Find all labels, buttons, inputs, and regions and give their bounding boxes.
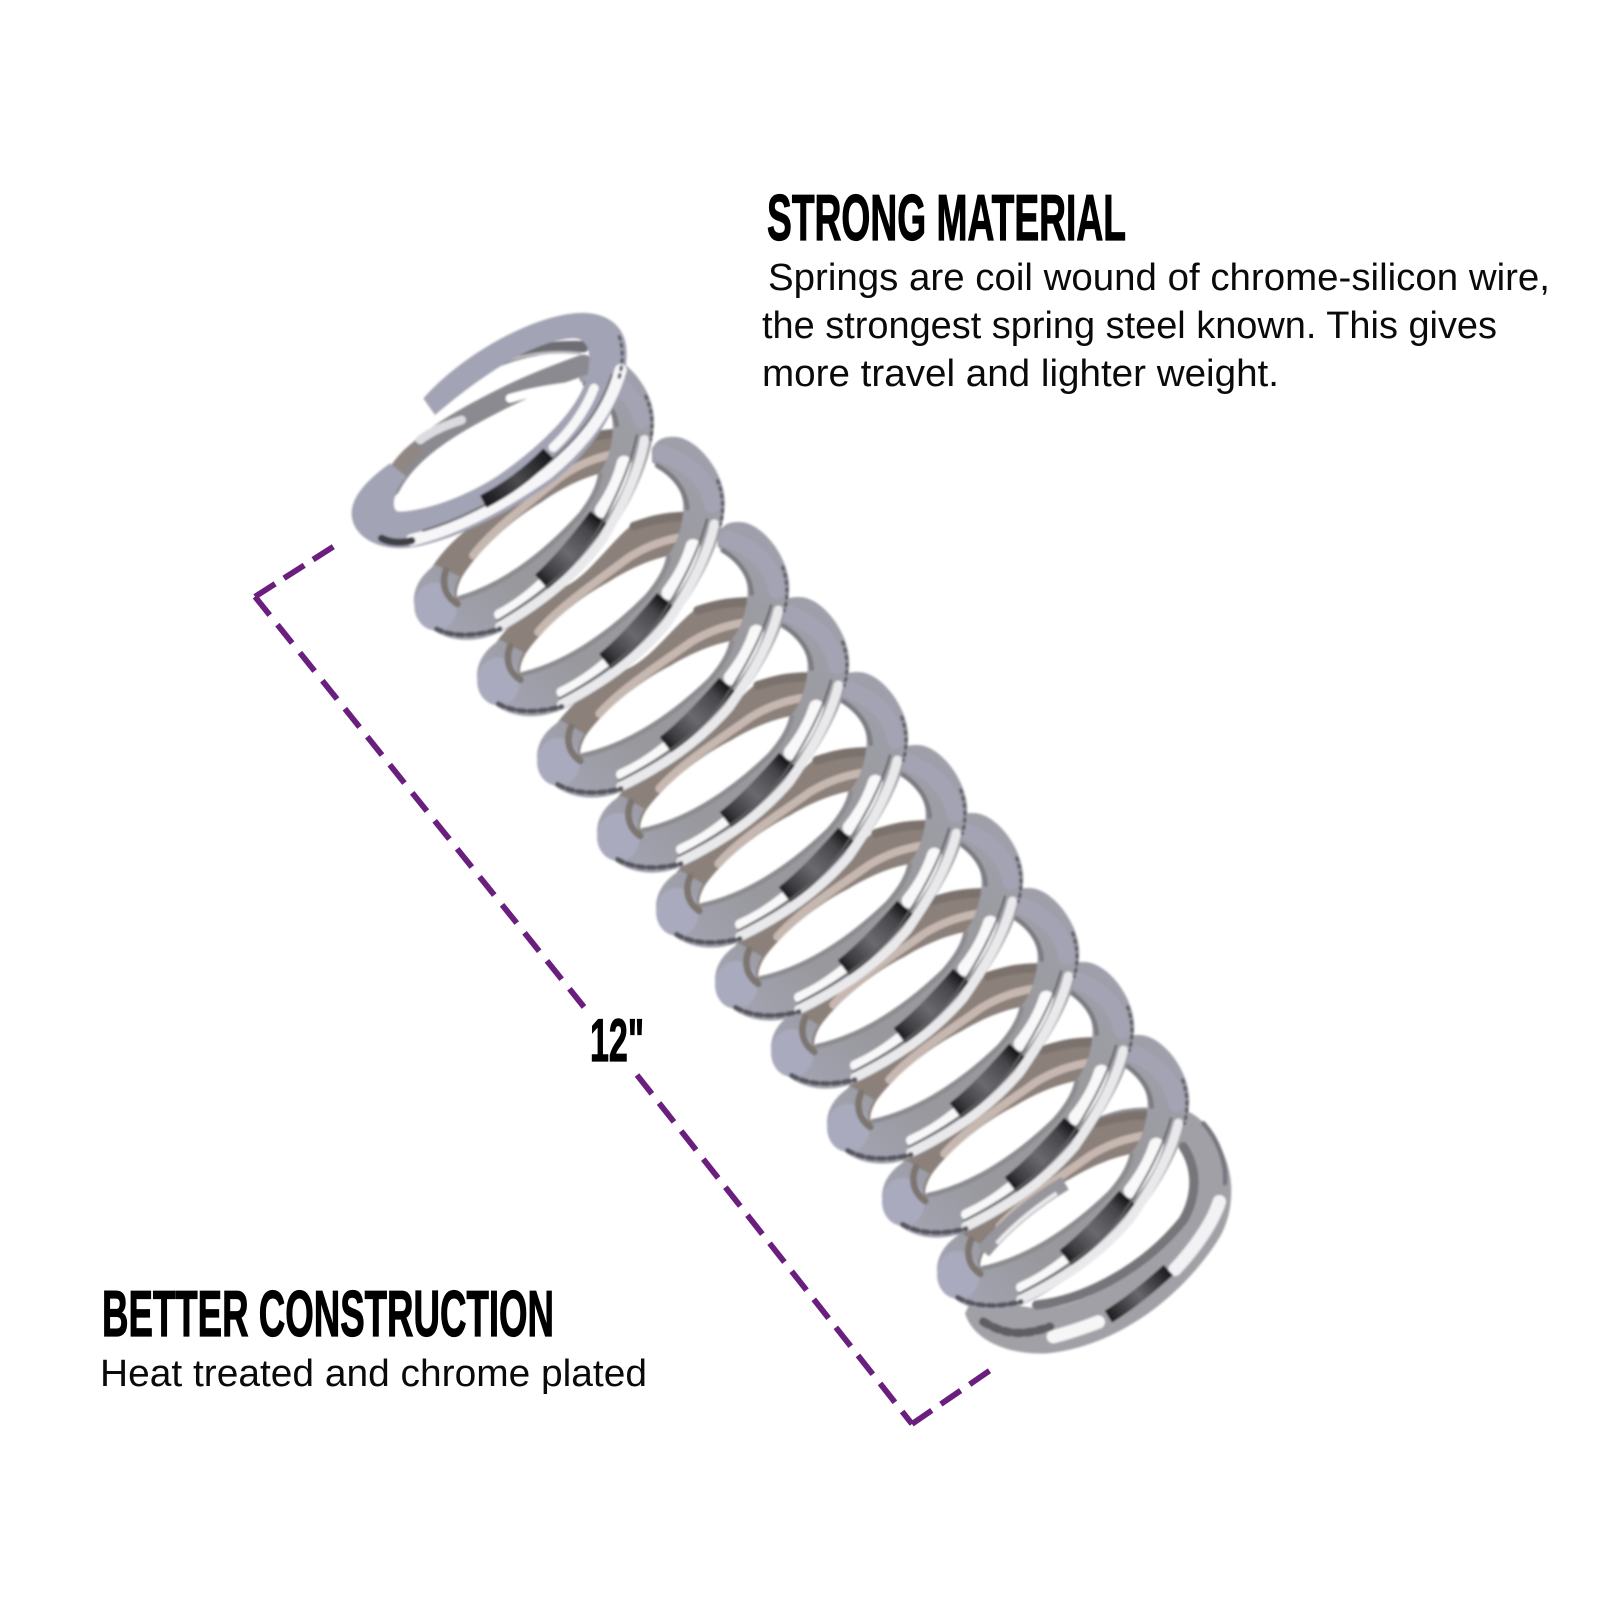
coil 2	[398, 351, 669, 644]
dimension bracket: dashed purple line	[255, 547, 992, 1424]
description: Springs are coil wound of chrome-silicon wire,	[768, 257, 1550, 299]
coil 5	[597, 597, 849, 873]
heading: STRONG MATERIAL	[767, 181, 1126, 254]
coil 9	[827, 888, 1079, 1164]
description	[762, 257, 1550, 395]
description: Heat treated and chrome plated	[100, 1353, 647, 1395]
text block: strong material	[762, 181, 1550, 395]
coil 4	[537, 522, 789, 798]
dimension label: 12"	[590, 1007, 644, 1074]
coil 12: bottom ring	[965, 1110, 1231, 1353]
coil 11	[937, 1035, 1189, 1311]
coil 3	[471, 435, 730, 718]
description: more travel and lighter weight.	[762, 353, 1279, 395]
coil 7	[715, 745, 967, 1021]
text block: better construction	[100, 1277, 647, 1395]
heading: BETTER CONSTRUCTION	[102, 1277, 554, 1350]
coil 10	[882, 962, 1134, 1238]
coil 8	[771, 813, 1023, 1089]
coil 1: top ring	[352, 313, 627, 548]
wire end tail	[983, 1183, 1065, 1252]
spring	[352, 313, 1231, 1353]
description: the strongest spring steel known. This gives	[762, 305, 1497, 347]
coil 6	[656, 672, 908, 948]
